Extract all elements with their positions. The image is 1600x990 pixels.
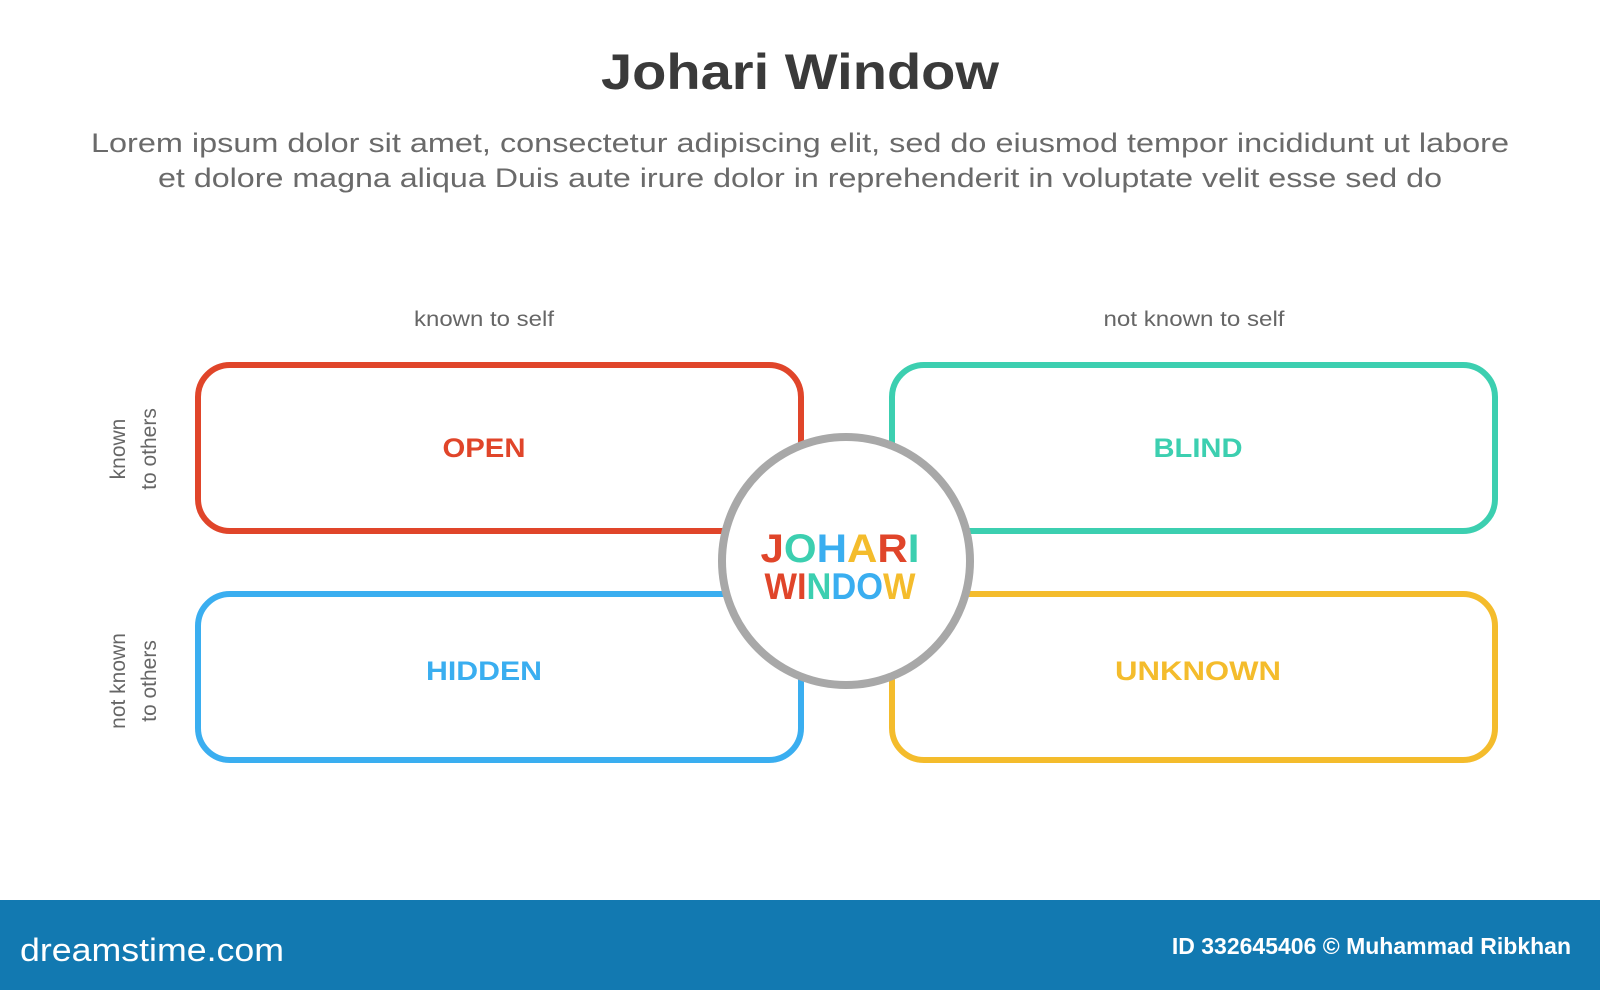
footer bar: ID 332645406 © Muhammad Ribkhan: [1172, 933, 1571, 959]
panel: blind: BLIND: [1154, 433, 1242, 463]
center circle: [722, 437, 970, 685]
header: known to self: known to self: [414, 308, 554, 331]
side label: not known to others: [107, 633, 161, 729]
subtitle: Lorem ipsum dolor sit amet, consectetur adipiscing elit, sed do eiusmod tempor incididunt ut labore: [91, 128, 1509, 158]
side label: not known to others: to others: [138, 640, 161, 722]
panel: hidden: [198, 594, 801, 760]
subtitle: et dolore magna aliqua Duis aute irure dolor in reprehenderit in voluptate velit esse sed do: [158, 163, 1442, 193]
side label: not known to others: not known: [107, 633, 130, 729]
center circle: JOHARI: [760, 527, 920, 571]
panel: hidden: HIDDEN: [426, 656, 542, 686]
header: not known to self: not known to self: [1104, 308, 1285, 331]
panel: blind: [892, 365, 1495, 531]
title: Johari Window: [601, 44, 999, 100]
subtitle: [91, 128, 1509, 193]
panel: open: OPEN: [442, 433, 526, 463]
footer bar: dreamstime.com: [20, 932, 284, 968]
center circle: WINDOW: [764, 566, 916, 607]
side label: known to others: [107, 408, 161, 490]
side label: known to others: known: [107, 419, 130, 479]
panel: unknown: UNKNOWN: [1115, 656, 1281, 686]
panel: open: [198, 365, 801, 531]
panel: unknown: [892, 594, 1495, 760]
side label: known to others: to others: [138, 408, 161, 490]
footer bar: [0, 900, 1600, 990]
